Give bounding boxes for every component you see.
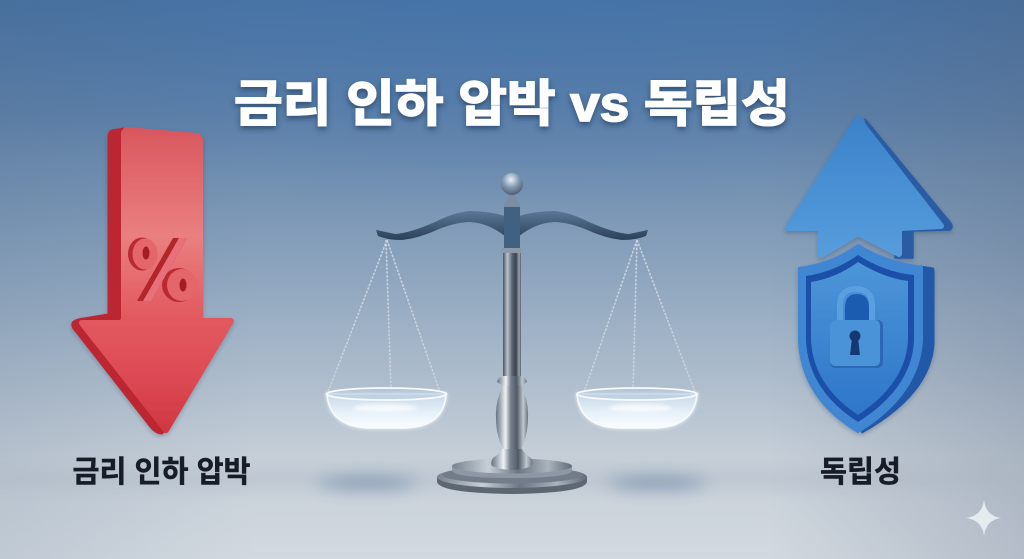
column (503, 252, 521, 378)
right glass pan (577, 388, 697, 428)
shield groove (806, 255, 914, 422)
pedestal vase (496, 385, 528, 449)
arrow side (865, 119, 952, 258)
finial neck (504, 194, 520, 207)
scale shadows on floor (317, 478, 707, 488)
arrow side face (72, 128, 172, 434)
left glass pan (326, 388, 446, 428)
icon: red down arrow with percent (72, 128, 231, 434)
right chains (584, 240, 695, 392)
shield outer (799, 245, 922, 432)
lock (830, 289, 883, 368)
percent symbol (128, 238, 197, 302)
title: 금리 인하 압박 vs 독립성 (234, 76, 790, 132)
icon: blue up arrow with shield and lock (788, 119, 952, 433)
column collar (501, 248, 523, 253)
pedestal lower flare (491, 447, 533, 470)
label: rate cut pressure: 금리 인하 압박 (72, 456, 250, 489)
icon: sparkle watermark (966, 500, 1001, 536)
shield side (858, 266, 934, 433)
beam (376, 211, 648, 240)
base lower disc (437, 477, 587, 494)
icon: balance scale (326, 173, 697, 494)
center block (504, 207, 520, 248)
column collar lower (497, 376, 527, 386)
finial ball (501, 173, 523, 195)
shield inner face (811, 262, 908, 415)
left chains (328, 240, 440, 392)
arrow front (788, 119, 941, 255)
label: independence: 독립성 (820, 456, 901, 489)
arrow front face (82, 130, 231, 430)
base upper disc (452, 466, 572, 478)
